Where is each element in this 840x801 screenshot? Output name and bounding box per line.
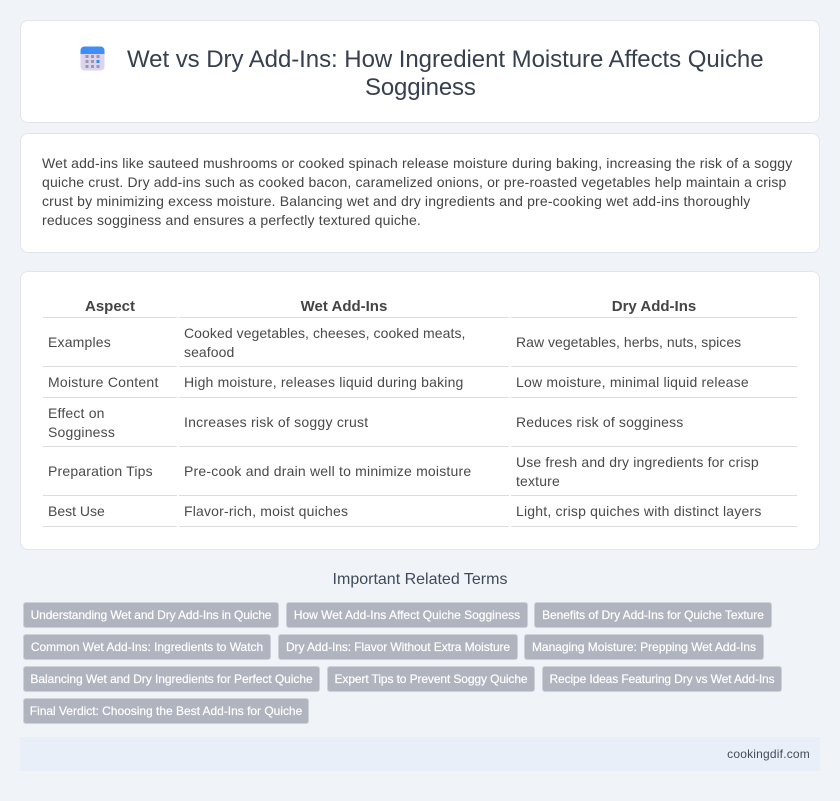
effect dry: Reduces risk of sogginess — [516, 414, 683, 430]
icon: calendar — [80, 46, 104, 70]
table header: dry add-ins: Dry Add-Ins — [612, 298, 696, 315]
moisture dry: Low moisture, minimal liquid release — [516, 374, 749, 390]
intro text: quiche crust. Dry add-ins such as cooked bacon, caramelized onions, or pre-roasted vegetables help maintain a crisp — [42, 174, 786, 190]
row: best use: Best Use — [48, 503, 105, 519]
header panel — [20, 20, 820, 123]
preparation dry — [516, 454, 759, 489]
tag group: related terms: Understanding Wet and Dry Add-Ins in Quiche — [31, 608, 271, 622]
row: effect on sogginess: Effect on — [48, 405, 105, 421]
examples dry: Raw vegetables, herbs, nuts, spices — [516, 334, 741, 350]
tag group: related terms: Common Wet Add-Ins: Ingredients to Watch — [31, 640, 263, 654]
table header: wet add-ins: Wet Add-Ins — [301, 298, 387, 315]
intro text — [42, 155, 792, 228]
related terms heading: Important Related Terms — [333, 571, 507, 588]
preparation dry: texture — [516, 473, 560, 489]
intro text: Wet add-ins like sauteed mushrooms or cooked spinach release moisture during baking, increasing the risk of a soggy — [42, 155, 792, 171]
panel: comparison table — [20, 271, 820, 550]
preparation wet: Pre-cook and drain well to minimize moisture — [184, 463, 471, 479]
intro text: crust by minimizing excess moisture. Balancing wet and dry ingredients and pre-cooking wet add-ins thoroughly — [42, 193, 750, 209]
tag group: related terms: Balancing Wet and Dry Ingredients for Perfect Quiche — [30, 672, 313, 686]
best use wet: Flavor-rich, moist quiches — [184, 503, 348, 519]
footer bar — [20, 737, 820, 771]
tag group: related terms: Recipe Ideas Featuring Dry vs Wet Add-Ins — [550, 672, 774, 686]
title — [127, 46, 764, 101]
row: preparation tips: Preparation Tips — [48, 463, 153, 479]
effect wet: Increases risk of soggy crust — [184, 414, 368, 430]
examples wet: Cooked vegetables, cheeses, cooked meats, — [184, 325, 465, 341]
title: Wet vs Dry Add-Ins: How Ingredient Moisture Affects Quiche — [127, 46, 764, 73]
row: moisture content: Moisture Content — [48, 374, 159, 390]
preparation dry: Use fresh and dry ingredients for crisp — [516, 454, 759, 470]
examples wet — [184, 325, 465, 360]
row: effect on sogginess: Sogginess — [48, 424, 115, 440]
panel: intro — [20, 133, 820, 253]
tag group: related terms: Dry Add-Ins: Flavor Without Extra Moisture — [286, 640, 510, 654]
intro text: reduces sogginess and ensures a perfectly textured quiche. — [42, 212, 421, 228]
tag group: related terms: Benefits of Dry Add-Ins for Quiche Texture — [542, 608, 764, 622]
table header: aspect: Aspect — [85, 298, 135, 315]
row: examples: Examples — [48, 334, 111, 350]
tag group: related terms: Managing Moisture: Prepping Wet Add-Ins — [532, 640, 756, 654]
tag group: related terms: Expert Tips to Prevent Soggy Quiche — [335, 672, 527, 686]
title: Sogginess — [365, 74, 476, 101]
moisture wet: High moisture, releases liquid during baking — [184, 374, 464, 390]
examples wet: seafood — [184, 344, 234, 360]
row: effect on sogginess — [48, 405, 115, 440]
footer source: cookingdif.com — [727, 747, 810, 761]
tag group: related terms: How Wet Add-Ins Affect Quiche Sogginess — [294, 608, 520, 622]
tag group: related terms — [23, 602, 782, 724]
tag group: related terms: Final Verdict: Choosing the Best Add-Ins for Quiche — [30, 704, 302, 718]
best use dry: Light, crisp quiches with distinct layers — [516, 503, 762, 519]
